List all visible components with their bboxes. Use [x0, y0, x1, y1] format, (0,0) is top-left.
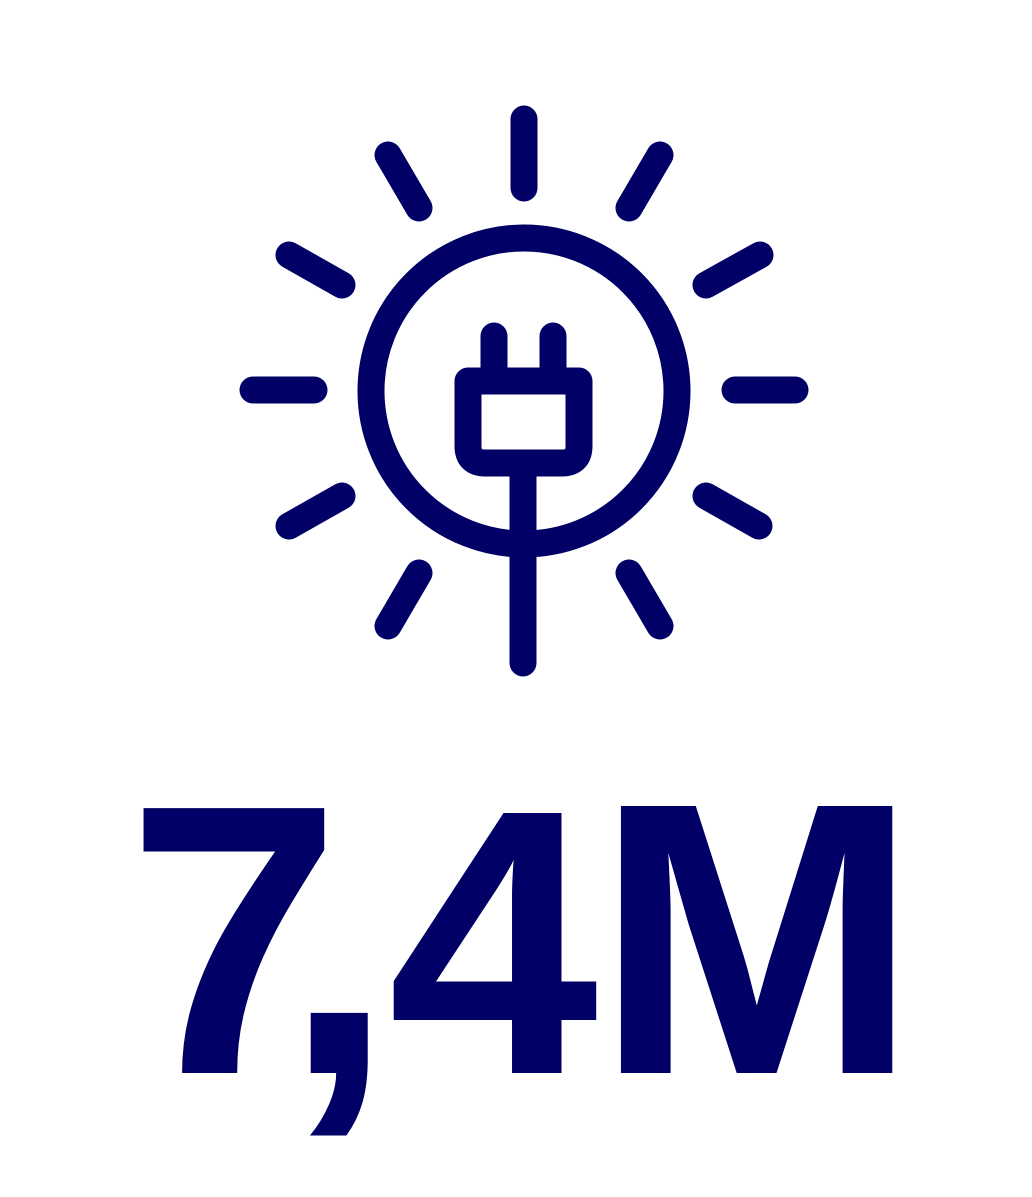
big number: 7	[127, 724, 341, 1155]
plug	[468, 336, 579, 663]
sun circle	[371, 238, 677, 544]
big number: M	[595, 723, 918, 1156]
big number: ,	[282, 707, 395, 1159]
big number: 4	[388, 732, 601, 1154]
sun rays	[253, 119, 795, 626]
icon: sun with electric plug	[253, 119, 795, 663]
